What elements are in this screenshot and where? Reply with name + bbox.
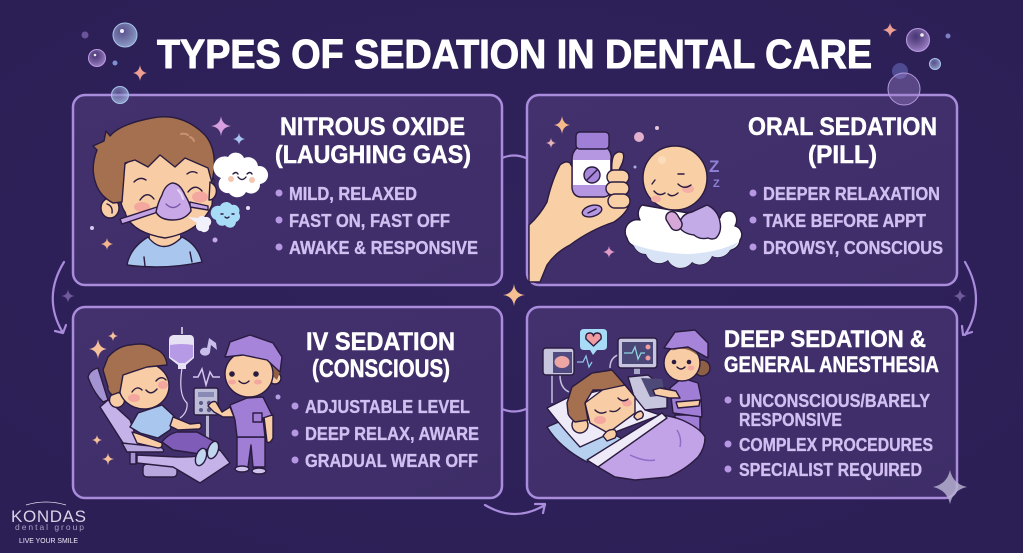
- bullet list: FAST ON, FAST OFF: [289, 210, 450, 231]
- illustration: hand holding pill bottle: [529, 132, 630, 282]
- bullet list: [292, 396, 479, 471]
- bullet list: GRADUAL WEAR OFF: [305, 450, 478, 471]
- panel: deep sedation and general anesthesia: [527, 307, 957, 498]
- heading: [724, 326, 939, 377]
- title: TYPES OF SEDATION IN DENTAL CARE: [157, 31, 872, 77]
- illustration: nurse in scrubs: [208, 335, 282, 474]
- bullet list: MILD, RELAXED: [289, 183, 417, 204]
- bullet list: UNCONSCIOUS/BARELY: [739, 390, 931, 411]
- heading: GENERAL ANESTHESIA: [724, 352, 939, 377]
- illustration: patient in dental chair: [88, 344, 230, 483]
- bullet list: DEEP RELAX, AWARE: [305, 423, 479, 444]
- sparkle centre: [503, 284, 525, 306]
- panel: nitrous oxide: [73, 95, 502, 285]
- logo: Kondas dental group: dental group: [15, 522, 84, 532]
- icon: sleeping Z letters: Z: [709, 157, 719, 176]
- sparkle bottom right: [933, 470, 967, 504]
- logo: Kondas dental group: KONDAS: [11, 507, 86, 526]
- bullet list: COMPLEX PROCEDURES: [739, 434, 933, 455]
- heading: (LAUGHING GAS): [275, 141, 471, 169]
- sparkles and dots: [90, 116, 250, 250]
- heading: IV SEDATION: [306, 328, 455, 356]
- heading: NITROUS OXIDE: [280, 113, 465, 141]
- sparkle left: [61, 289, 75, 303]
- bullet list: SPECIALIST REQUIRED: [739, 459, 922, 480]
- sparkle right: [953, 289, 967, 303]
- decorative bubbles top right: [883, 23, 950, 105]
- illustration: baby sleeping on a cloud: [625, 146, 742, 268]
- illustration: monitors: [543, 329, 657, 403]
- decorative bubbles top left: [82, 23, 147, 104]
- bullet list: [276, 183, 478, 258]
- icon: white happy cloud: [213, 153, 268, 197]
- icon: small blue cloud: [211, 202, 240, 228]
- icon: exhaled puff: [188, 216, 211, 232]
- sparkles and dots: [546, 116, 659, 258]
- heading: [748, 113, 937, 169]
- bullet list: ADJUSTABLE LEVEL: [305, 396, 470, 417]
- heading: DEEP SEDATION &: [724, 326, 926, 353]
- bullet list: [750, 183, 943, 258]
- logo: Kondas dental group: LIVE YOUR SMILE: [19, 538, 78, 545]
- bullet list: AWAKE & RESPONSIVE: [289, 237, 478, 258]
- illustration: boy with nasal mask: [93, 117, 216, 267]
- logo: Kondas dental group: [11, 502, 86, 545]
- heading: (PILL): [808, 141, 877, 169]
- icon: music note: [200, 338, 217, 356]
- illustration: patient in bed under blanket: [547, 370, 705, 480]
- bullet list: [724, 390, 933, 480]
- panel: iv sedation: [73, 307, 502, 498]
- icon: sleeping Z letters: [709, 157, 720, 190]
- heading: [275, 113, 471, 169]
- bullet list: DEEPER RELAXATION: [763, 183, 940, 204]
- illustration: iv drip and monitor: [169, 327, 220, 441]
- bullet list: TAKE BEFORE APPT: [763, 210, 927, 231]
- heading: [306, 328, 455, 383]
- panel: oral sedation: [527, 95, 957, 285]
- sparkles and dots: [89, 331, 280, 465]
- connector arrows: [53, 156, 976, 514]
- bullet list: DROWSY, CONSCIOUS: [763, 237, 943, 258]
- bullet list: RESPONSIVE: [739, 409, 842, 430]
- icon: sleeping Z letters: Z: [713, 178, 720, 190]
- heading: ORAL SEDATION: [748, 113, 937, 141]
- heading: (CONSCIOUS): [312, 355, 450, 383]
- illustration: nurse operating machine: [628, 330, 710, 432]
